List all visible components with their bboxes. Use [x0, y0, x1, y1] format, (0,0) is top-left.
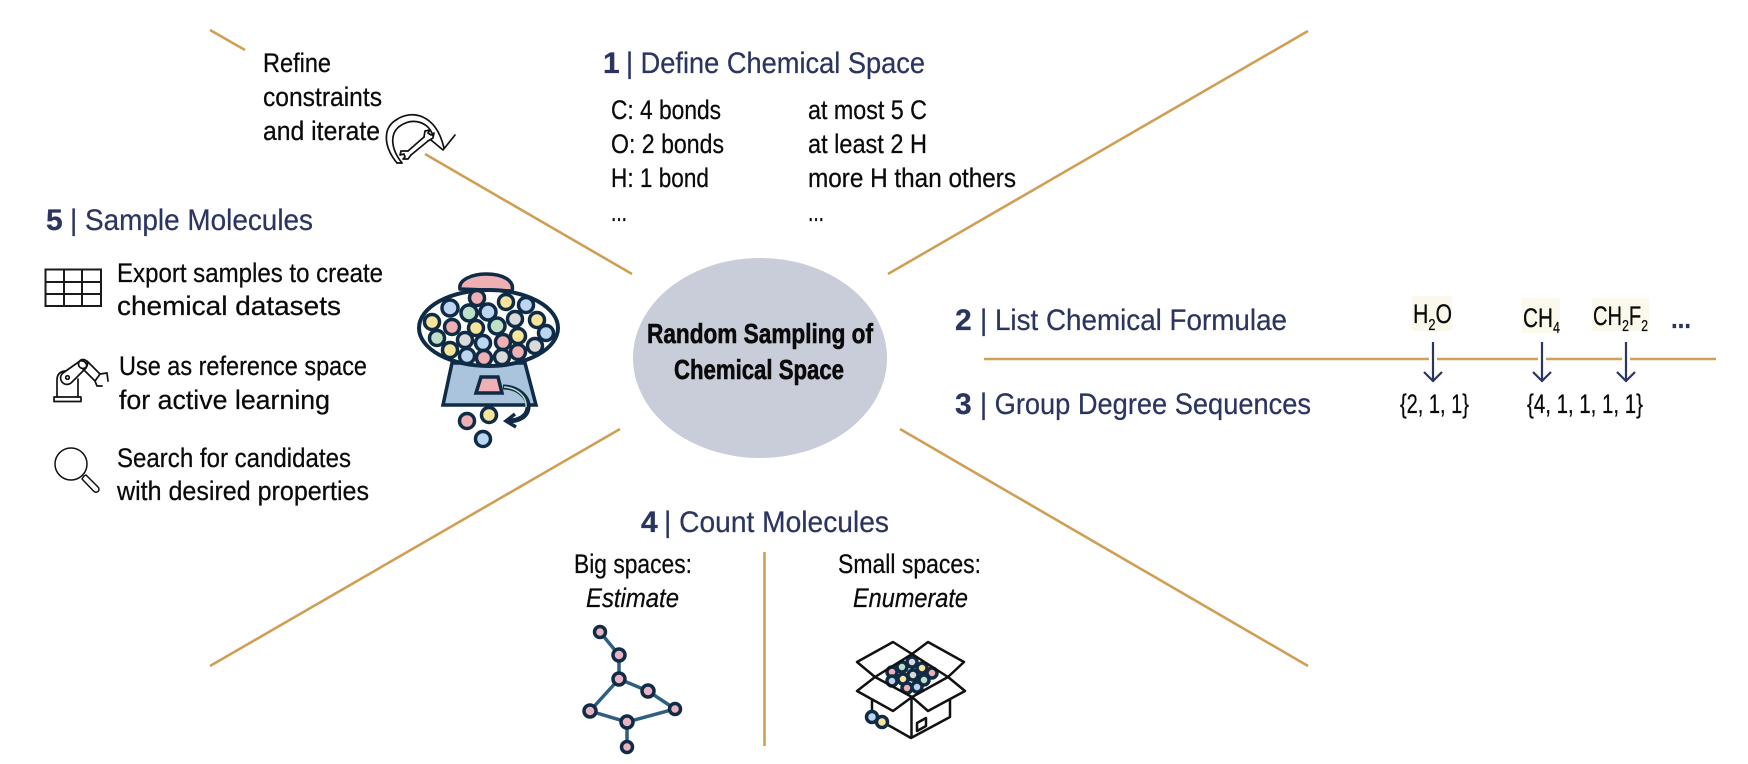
icon: molecular graph	[584, 626, 680, 752]
formula: CH2F2: 2	[1622, 318, 1629, 335]
constraints list	[808, 95, 1016, 227]
constraints list: at most 5 C	[808, 95, 927, 125]
heading: step 1: 1	[603, 47, 620, 80]
arrows from formulae to degree sequences	[1424, 342, 1635, 381]
heading: step 5: | Sample Molecules	[70, 204, 313, 237]
heading: step 2: 2	[955, 304, 972, 337]
central title: Chemical Space	[674, 354, 844, 385]
big spaces label	[574, 549, 692, 613]
icon: wrench with circular arrow	[386, 115, 455, 163]
constraints list: more H than others	[808, 163, 1016, 193]
central title: Random Sampling of	[647, 318, 874, 349]
constraints list: at least 2 H	[808, 129, 927, 159]
bond rules list	[611, 95, 724, 227]
small spaces label: Small spaces:	[838, 549, 981, 579]
small spaces label	[838, 549, 981, 613]
big spaces label: Estimate	[586, 583, 679, 613]
heading: step 3: | Group Degree Sequences	[980, 388, 1311, 421]
formula: CH4: 4	[1553, 320, 1560, 337]
formula: CH4: CH	[1523, 303, 1561, 333]
degree sequence: methane: {4, 1, 1, 1, 1}	[1527, 389, 1643, 419]
refine note: constraints	[263, 82, 382, 112]
small spaces label: Enumerate	[853, 583, 968, 613]
active learning text: Use as reference space	[119, 351, 367, 381]
heading: step 3: 3	[955, 388, 972, 421]
bond rules list: C: 4 bonds	[611, 95, 721, 125]
search text	[116, 443, 369, 506]
ellipsis: ...	[1671, 304, 1691, 334]
degree sequence: water: {2, 1, 1}	[1400, 389, 1469, 419]
formula: H2O: H	[1413, 299, 1432, 329]
formula: H2O: O	[1435, 299, 1452, 329]
central title	[647, 318, 874, 385]
heading: step 1: | Define Chemical Space	[626, 47, 925, 80]
formula: CH2F2: F	[1629, 301, 1641, 331]
formula: H2O	[1412, 296, 1452, 334]
bond rules list: H: 1 bond	[611, 163, 709, 193]
export text: Export samples to create	[117, 258, 383, 288]
icon: robot arm	[54, 360, 108, 402]
active learning text	[119, 351, 367, 415]
heading: step 2: | List Chemical Formulae	[980, 304, 1287, 337]
export text: chemical datasets	[117, 291, 341, 321]
icon: table	[46, 270, 101, 306]
icon: gumball machine	[419, 274, 558, 446]
active learning text: for active learning	[119, 385, 330, 415]
search text: Search for candidates	[117, 443, 351, 473]
refine note: Refine	[263, 48, 331, 78]
central ellipse	[633, 258, 887, 458]
icon: open box of molecules	[857, 642, 965, 738]
bond rules list: O: 2 bonds	[611, 129, 724, 159]
formula: H2O: 2	[1428, 317, 1436, 334]
heading: step 4: 4	[641, 506, 658, 539]
refine note	[263, 48, 382, 146]
export text	[117, 258, 383, 321]
refine note: and iterate	[263, 116, 380, 146]
formula: CH2F2	[1592, 298, 1649, 335]
formula: CH2F2: 2	[1641, 318, 1648, 335]
constraints list: ...	[808, 197, 824, 227]
big spaces label: Big spaces:	[574, 549, 692, 579]
formula: CH2F2: CH	[1593, 301, 1631, 331]
heading: step 5: 5	[46, 204, 63, 237]
search text: with desired properties	[116, 476, 369, 506]
icon: magnifier	[55, 448, 99, 492]
bond rules list: ...	[611, 197, 627, 227]
heading: step 4: | Count Molecules	[664, 506, 889, 539]
